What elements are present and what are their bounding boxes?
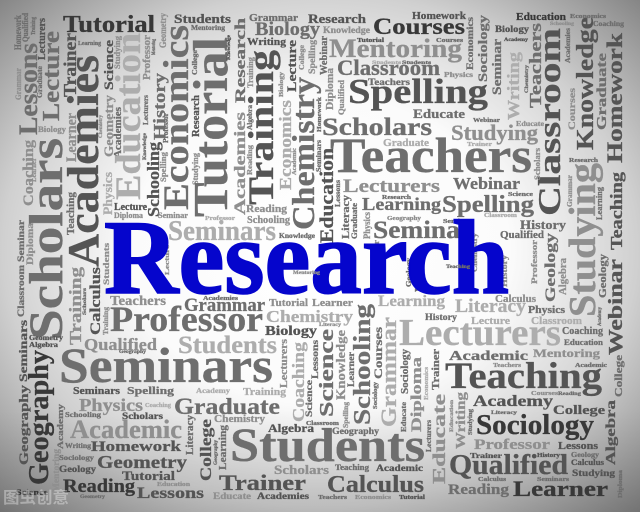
word cloud: horizontal words: Learning xyxy=(362,194,441,214)
word cloud: vertical words: Lecture xyxy=(284,40,299,92)
word cloud: vertical words: Academies xyxy=(59,55,108,267)
word cloud: vertical words: Training xyxy=(241,50,281,205)
word cloud: vertical words: College xyxy=(191,50,199,75)
word cloud: horizontal words: Algebra xyxy=(268,421,314,435)
word cloud: horizontal words: Lecturers xyxy=(343,176,440,197)
word cloud: horizontal words: Academic xyxy=(575,363,607,369)
word cloud: vertical words: Training xyxy=(66,266,85,345)
word cloud: vertical words: Algebra xyxy=(246,104,254,130)
word cloud: horizontal words: Professor xyxy=(205,216,235,222)
word cloud: horizontal words: Students xyxy=(372,61,401,66)
word cloud: horizontal words: Tutorial xyxy=(357,38,384,44)
word cloud: horizontal words: Professor xyxy=(474,437,550,453)
word cloud: horizontal words: Writing xyxy=(65,442,92,450)
word cloud: vertical words: Biology xyxy=(279,72,285,97)
word cloud: horizontal words: Teachers xyxy=(330,127,532,183)
word cloud: vertical words: Chemistry xyxy=(525,64,530,93)
word cloud: vertical words: College xyxy=(298,45,306,70)
word cloud: vertical words: Geology xyxy=(405,257,413,287)
word cloud: horizontal words: Academy xyxy=(504,38,529,43)
word cloud: vertical words: Classroom xyxy=(16,264,26,317)
word cloud: vertical words: Sociology xyxy=(400,349,411,394)
word cloud: horizontal words: Spelling xyxy=(442,192,534,218)
word cloud: horizontal words: Qualified xyxy=(500,229,544,241)
word cloud: vertical words: Geography xyxy=(214,439,219,465)
word cloud: vertical words: Literacy xyxy=(185,415,196,455)
word cloud: horizontal words: Academy xyxy=(196,387,231,395)
word cloud: horizontal words: Lessons xyxy=(558,441,598,452)
word cloud: horizontal words: Academies xyxy=(203,296,239,302)
word cloud: horizontal words: Reading xyxy=(63,476,136,497)
word cloud: horizontal words: Graduate xyxy=(383,138,430,149)
word cloud: horizontal words: Graduate xyxy=(174,394,280,419)
word cloud: vertical words: Professor xyxy=(162,113,170,143)
word cloud: horizontal words: Geometry xyxy=(97,452,187,472)
word cloud: horizontal words: Training xyxy=(243,387,286,398)
word cloud: vertical words: Teachers xyxy=(526,22,545,108)
small words over the main word: Teaching xyxy=(446,265,471,270)
word cloud: horizontal words: Algebra xyxy=(29,341,59,349)
word cloud: horizontal words: Lecturers xyxy=(399,312,561,354)
word cloud: vertical words: Grammar xyxy=(14,68,23,100)
word cloud: vertical words: Seminars xyxy=(315,140,323,172)
word cloud: horizontal words: Academies xyxy=(257,491,310,501)
word cloud: horizontal words: Calculus xyxy=(571,458,604,467)
word cloud: vertical words: Algebra xyxy=(558,258,569,295)
word cloud: horizontal words: Teachers xyxy=(318,495,348,501)
word cloud: vertical words: Students xyxy=(102,243,111,285)
word cloud: horizontal words: Coaching xyxy=(562,326,603,337)
word cloud: vertical words: History xyxy=(500,255,509,287)
word cloud: horizontal words: Tutorial xyxy=(122,468,175,483)
word cloud: horizontal words: Professor xyxy=(110,299,263,339)
word cloud: vertical words: Spelling xyxy=(307,39,317,74)
word cloud: vertical words: Homework xyxy=(602,32,627,163)
word cloud: vertical words: Learning xyxy=(217,424,229,470)
word cloud: vertical words: Algebra xyxy=(604,400,619,465)
word cloud: vertical words: Lessons xyxy=(334,180,342,207)
word cloud: vertical words: Lecturers xyxy=(142,95,150,125)
word cloud: vertical words: Knowledge xyxy=(143,132,148,160)
word cloud: vertical words: Chemistry xyxy=(99,114,104,138)
word cloud: vertical words: Learner xyxy=(29,158,38,182)
word cloud: vertical words: Homework xyxy=(317,96,323,132)
word cloud: horizontal words: Seminars xyxy=(168,216,276,247)
word cloud: vertical words: Sociology xyxy=(373,382,379,409)
word cloud: horizontal words: Geometry xyxy=(80,495,106,500)
word cloud: vertical words: Mentoring xyxy=(51,448,61,492)
word cloud: vertical words: Grammar xyxy=(566,175,574,207)
word cloud: horizontal words: Classroom xyxy=(531,316,583,327)
word cloud: vertical words: Learner xyxy=(346,352,356,387)
word cloud: horizontal words: Reading xyxy=(246,203,288,215)
main word: Research in blue: Research xyxy=(104,199,509,316)
word cloud: horizontal words: Education xyxy=(157,482,191,488)
word cloud: vertical words: Diploma xyxy=(618,470,624,498)
word cloud: horizontal words: Students xyxy=(402,61,431,66)
word cloud: horizontal words: Courses xyxy=(373,14,465,39)
word cloud: vertical words: Academic xyxy=(292,148,298,175)
word cloud: vertical words: Teaching xyxy=(607,171,626,250)
word cloud: vertical words: Research xyxy=(190,95,202,137)
word cloud: horizontal words: Reading xyxy=(558,392,582,397)
word cloud: vertical words: Training xyxy=(31,17,37,35)
word cloud: horizontal words: Calculus xyxy=(495,294,536,305)
word cloud: horizontal words: Mentoring xyxy=(329,34,462,63)
word cloud: vertical words: Schooling xyxy=(350,304,376,425)
word cloud: vertical words: Physics xyxy=(100,172,115,215)
word cloud: vertical words: Geometry xyxy=(158,13,168,48)
word cloud: vertical words: Coaching xyxy=(289,341,308,422)
word cloud: horizontal words: Teaching xyxy=(445,356,603,397)
word cloud: horizontal words: Tutorial xyxy=(269,298,308,309)
word cloud: horizontal words: Educate xyxy=(516,120,544,128)
word cloud: horizontal words: Teachers xyxy=(368,77,411,87)
word cloud: horizontal words: History xyxy=(537,453,560,459)
word cloud: vertical words: Learning xyxy=(595,187,604,220)
word cloud: vertical words: Diploma xyxy=(25,222,35,265)
word cloud: vertical words: Geology xyxy=(598,254,609,298)
word cloud: vertical words: Schooling xyxy=(144,141,163,217)
word cloud: horizontal words: Students xyxy=(230,419,425,472)
word cloud: vertical words: Education xyxy=(317,148,338,243)
word cloud: vertical words: Learner xyxy=(64,113,80,162)
word cloud: vertical words: Seminars xyxy=(16,320,30,382)
word cloud: vertical words: Economics xyxy=(424,366,430,400)
word cloud: horizontal words: Studying xyxy=(572,468,616,478)
word cloud: horizontal words: Schooling xyxy=(65,411,102,419)
word cloud: horizontal words: Research xyxy=(569,158,599,164)
word cloud: horizontal words: Teachers xyxy=(110,294,167,309)
word cloud: vertical words: Trainer xyxy=(431,348,442,390)
word cloud: horizontal words: Knowledge xyxy=(323,25,370,35)
word cloud: horizontal words: College xyxy=(553,402,605,417)
word cloud: horizontal words: Tutorial xyxy=(63,12,155,38)
word cloud: vertical words: Scholars xyxy=(533,148,542,180)
word cloud: horizontal words: Schooling xyxy=(550,22,575,27)
word cloud: horizontal words: Trainer xyxy=(219,470,306,495)
word cloud: horizontal words: Seminars xyxy=(73,386,120,397)
word cloud: vertical words: Economics xyxy=(276,100,295,190)
small words over the main word xyxy=(293,265,471,276)
word cloud: horizontal words: Coaching xyxy=(593,20,625,28)
word cloud: vertical words: Courses xyxy=(567,87,577,130)
word cloud: horizontal words: Literacy xyxy=(319,323,342,328)
word cloud: vertical words: Seminar xyxy=(16,220,26,262)
word cloud: horizontal words: Reading xyxy=(448,482,510,498)
word cloud: vertical words: Studying xyxy=(562,163,604,317)
word cloud: vertical words: Graduate xyxy=(36,66,44,98)
word cloud: horizontal words: Geography xyxy=(119,350,147,355)
word cloud: vertical words: Coaching xyxy=(21,139,37,206)
word cloud: horizontal words: Seminar xyxy=(158,211,188,220)
word cloud: horizontal words: History xyxy=(425,312,458,322)
word cloud: horizontal words: Science xyxy=(16,488,49,497)
word cloud: vertical words: Professor xyxy=(530,239,539,284)
word cloud: vertical words: Education xyxy=(108,33,148,200)
word cloud: horizontal words: Mentoring xyxy=(191,24,226,32)
word cloud: horizontal words: Homework xyxy=(91,439,182,455)
word cloud: vertical words: Academies xyxy=(232,112,249,215)
word cloud: horizontal words: Mentoring xyxy=(533,346,600,360)
word cloud: horizontal words: Calculus xyxy=(327,472,424,498)
word cloud: horizontal words: Students xyxy=(174,11,231,26)
word cloud: horizontal words: Sociology xyxy=(476,410,594,441)
word cloud: vertical words: Geometry xyxy=(101,94,116,157)
word cloud: horizontal words: Diploma xyxy=(114,211,143,220)
word cloud: horizontal words: Seminars xyxy=(537,477,570,483)
word cloud: horizontal words: Classroom xyxy=(306,421,339,427)
word cloud: vertical words: Mentoring xyxy=(152,39,157,55)
word cloud: horizontal words: Grammar xyxy=(249,13,299,24)
word cloud: vertical words: Academies xyxy=(113,107,124,158)
word cloud: horizontal words: Research xyxy=(382,195,412,201)
word cloud: horizontal words: Courses xyxy=(436,38,464,44)
word cloud: vertical words: Lecturers xyxy=(279,339,290,388)
word cloud: horizontal words: Webinar xyxy=(473,118,500,124)
word cloud: vertical words: Writing xyxy=(504,51,523,120)
word cloud: vertical words: Teaching xyxy=(65,192,77,235)
word cloud: vertical words: Education xyxy=(450,400,455,432)
word cloud: horizontal words: Seminars xyxy=(59,337,273,393)
word cloud: horizontal words: Literacy xyxy=(455,296,527,317)
word cloud: horizontal words: Seminar xyxy=(443,219,472,225)
word cloud: horizontal words: Biology xyxy=(495,24,530,34)
word cloud: vertical words: Scholars xyxy=(83,288,88,315)
word cloud: horizontal words: Science xyxy=(508,192,533,198)
word cloud: vertical words: Geology xyxy=(543,232,559,302)
word cloud: horizontal words: Classroom xyxy=(484,213,517,219)
word cloud: horizontal words: Teachers xyxy=(493,363,522,369)
word cloud: vertical words: Trainer xyxy=(60,33,80,97)
word cloud: horizontal words: Calculus xyxy=(478,477,507,483)
word cloud: vertical words: Training xyxy=(246,57,255,88)
word cloud: horizontal words: Lecture xyxy=(114,202,148,213)
word cloud: vertical words: Chemistry xyxy=(285,77,321,230)
word cloud: horizontal words: Educate xyxy=(213,491,251,501)
word cloud: vertical words: Writing xyxy=(454,392,469,449)
word cloud: horizontal words: Studying xyxy=(451,120,538,145)
word cloud: horizontal words: Schooling xyxy=(247,215,290,226)
word cloud: vertical words: Educate xyxy=(429,394,449,484)
word cloud: vertical words: Webinar xyxy=(605,259,627,355)
word cloud: vertical words: Physics xyxy=(362,212,372,239)
word cloud: horizontal words: Academic xyxy=(70,415,182,444)
word cloud: vertical words: Academy xyxy=(56,404,65,449)
word cloud: horizontal words: Physics xyxy=(528,305,565,316)
word cloud: horizontal words: Teaching xyxy=(335,463,369,472)
word cloud: horizontal words: Seminar xyxy=(373,217,472,244)
word cloud: vertical words: Academies xyxy=(564,28,572,63)
word cloud: vertical words: Spelling xyxy=(159,152,168,182)
word cloud: vertical words: Graduate xyxy=(350,203,359,239)
word cloud: vertical words: Knowledge xyxy=(333,330,348,400)
word cloud: horizontal words: Scholars xyxy=(274,462,329,477)
word cloud: horizontal words: Chemistry xyxy=(266,307,354,326)
word cloud: horizontal words: Scholars xyxy=(122,411,164,421)
word cloud: horizontal words: Learning xyxy=(78,41,101,47)
word cloud: horizontal words: Academic xyxy=(376,463,423,473)
word cloud: horizontal words: Classroom xyxy=(337,55,440,80)
word cloud: horizontal words: Learning xyxy=(378,293,445,310)
word cloud: vertical words: Knowledge xyxy=(573,17,599,150)
word cloud: horizontal words: Spelling xyxy=(348,72,489,111)
word cloud: horizontal words: Qualified xyxy=(449,450,568,481)
word cloud: vertical words: Studying xyxy=(113,36,122,69)
word cloud: horizontal words: Homework xyxy=(412,11,466,22)
word cloud: vertical words: Grammar xyxy=(376,317,401,427)
word cloud: horizontal words: Geometry xyxy=(29,334,64,342)
word cloud: vertical words: Webinar xyxy=(319,35,330,75)
word cloud: horizontal words: Academy xyxy=(473,393,553,410)
word cloud: vertical words: Sociology xyxy=(475,14,490,82)
word cloud: vertical words: Academy xyxy=(598,307,603,326)
word cloud: horizontal words: Geology xyxy=(59,464,97,474)
word cloud: horizontal words: Research xyxy=(308,11,367,26)
word cloud: horizontal words: Academic xyxy=(449,349,528,364)
word cloud: horizontal words: History xyxy=(520,217,567,232)
word cloud: horizontal words: Educate xyxy=(413,106,465,121)
word cloud: vertical words: Studying xyxy=(468,409,474,435)
word cloud: vertical words: Qualified xyxy=(21,13,30,42)
word cloud: horizontal words: Education xyxy=(516,11,566,23)
word cloud: horizontal words: Physics xyxy=(79,395,143,415)
word cloud: horizontal words: Knowledge xyxy=(279,232,315,240)
word cloud: vertical words: Lecture xyxy=(39,31,65,121)
word cloud: horizontal words: Biology xyxy=(38,125,66,134)
word cloud: vertical words: Training xyxy=(102,306,110,335)
word cloud: vertical words: Spelling xyxy=(342,401,350,428)
word cloud: vertical words: Classroom xyxy=(531,28,567,216)
small words over the main word: Mentoring xyxy=(293,271,321,276)
word cloud: horizontal words: Scholars xyxy=(322,114,432,141)
word cloud: vertical words: Geography xyxy=(16,384,31,465)
word cloud: horizontal words: Sociology xyxy=(59,454,95,462)
word cloud: horizontal words: Education xyxy=(564,338,604,347)
word cloud: horizontal words: Economics xyxy=(355,495,392,501)
word cloud: vertical words: College xyxy=(198,419,215,481)
word cloud: vertical words: Tutorial xyxy=(183,37,238,217)
word cloud: vertical words: Lessons xyxy=(14,43,43,135)
word cloud: horizontal words: Chemistry xyxy=(214,414,265,425)
word cloud: vertical words: Diploma xyxy=(325,68,336,110)
word cloud: vertical words: Economics xyxy=(156,25,196,210)
word cloud: vertical words: Literacy xyxy=(340,194,352,239)
word cloud: horizontal words: Tutorial xyxy=(399,495,425,501)
word cloud: vertical words: Courses xyxy=(371,327,385,379)
word cloud: horizontal words: Trainer xyxy=(467,142,492,148)
word cloud: vertical words: Webinar xyxy=(372,239,381,277)
word cloud: horizontal words: Physics xyxy=(444,71,473,79)
word cloud: horizontal words: Learner xyxy=(312,298,354,309)
word cloud: horizontal words: Trainer xyxy=(470,452,502,460)
word cloud: vertical words: Diploma xyxy=(409,356,425,432)
word cloud: vertical words: Lecture xyxy=(165,245,171,275)
word cloud: horizontal words: Qualified xyxy=(84,335,158,354)
word cloud: vertical words: Chemistry xyxy=(471,232,479,272)
word cloud: vertical words: Economics xyxy=(465,16,475,70)
word cloud: horizontal words: Courses xyxy=(531,391,559,397)
word cloud: horizontal words: Geography xyxy=(332,426,380,436)
word cloud: horizontal words: Learner xyxy=(513,476,608,501)
word cloud: vertical words: Calculus xyxy=(88,267,104,335)
word cloud: vertical words: Science xyxy=(101,40,116,90)
word cloud: horizontal words: Literacy xyxy=(491,411,518,416)
word cloud: vertical words: College xyxy=(614,354,625,397)
word cloud: vertical words: Reading xyxy=(246,144,254,175)
word cloud: vertical words: Professor xyxy=(141,35,153,80)
word cloud: vertical words: Educate xyxy=(400,402,408,432)
word cloud: horizontal words: Grammar xyxy=(184,295,266,316)
word cloud: horizontal words: Lessons xyxy=(137,485,204,502)
word cloud: vertical words: Geography xyxy=(24,350,55,485)
word cloud: vertical words: History xyxy=(150,72,169,140)
word cloud: vertical words: Seminar xyxy=(489,39,504,95)
word cloud: horizontal words: Geology xyxy=(571,451,600,459)
word cloud: horizontal words: Lecture xyxy=(471,316,511,327)
word cloud: horizontal words: Economics xyxy=(570,14,607,20)
watermark: 图虫创意 xyxy=(3,488,69,507)
word cloud: vertical words: Writing xyxy=(414,255,425,292)
word cloud: horizontal words: Biology xyxy=(265,324,317,339)
word cloud: horizontal words: Spelling xyxy=(127,385,175,397)
word cloud: vertical words: Science xyxy=(304,380,314,417)
word cloud: vertical words: Homework xyxy=(13,15,23,50)
word cloud: vertical words: Research xyxy=(233,17,249,103)
word cloud: vertical words: Scholars xyxy=(20,138,73,340)
word cloud: horizontal words: Geography xyxy=(387,216,421,222)
word cloud: vertical words: Studying xyxy=(191,153,200,185)
word cloud: horizontal words: Biology xyxy=(255,19,321,40)
word cloud: horizontal words: Coaching xyxy=(145,403,171,409)
word cloud: horizontal words: Writing xyxy=(247,37,286,48)
word cloud: vertical words: Knowledge xyxy=(227,34,232,60)
word cloud: vertical words: Qualified xyxy=(337,79,346,115)
word cloud: vertical words: Lecturers xyxy=(37,18,48,60)
word cloud: vertical words: Science xyxy=(316,329,338,417)
word cloud: vertical words: Graduate xyxy=(595,53,610,130)
word cloud: vertical words: Lessons xyxy=(310,339,320,379)
word cloud: vertical words: Lecturers xyxy=(425,420,433,452)
word cloud: horizontal words: Webinar xyxy=(453,174,520,193)
word cloud: horizontal words: Students xyxy=(178,332,277,359)
